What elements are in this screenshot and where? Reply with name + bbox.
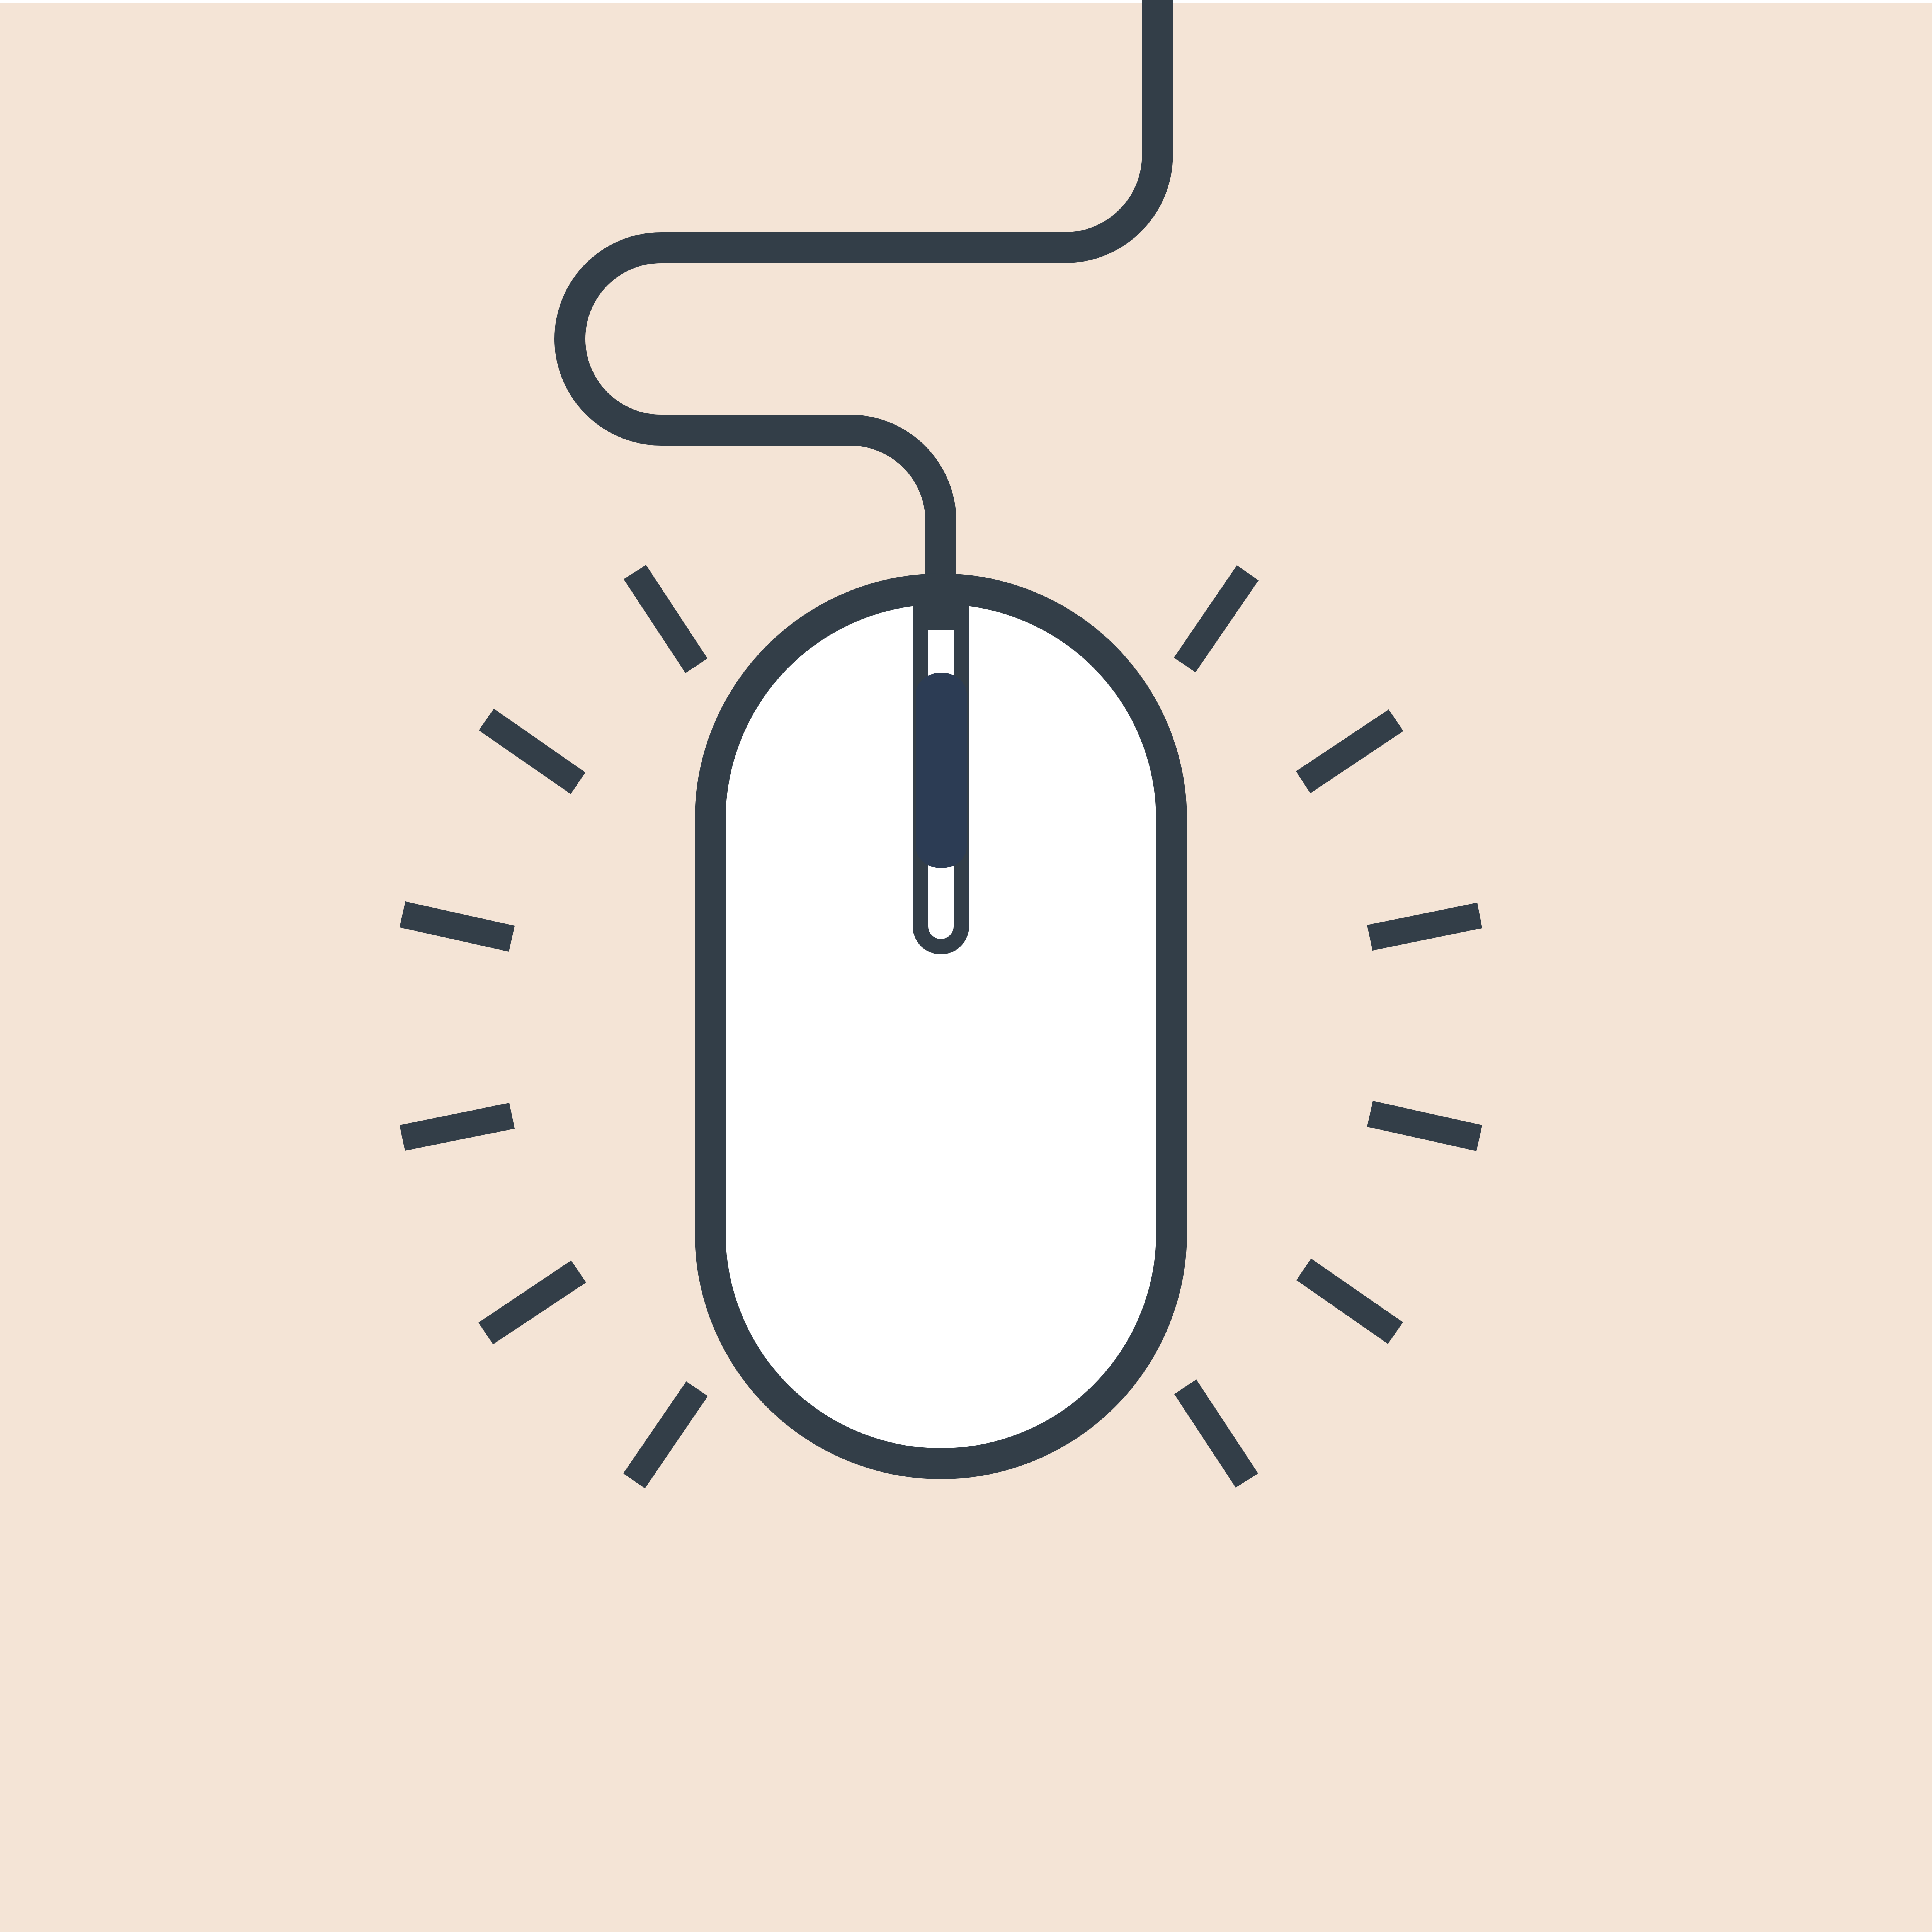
tick: upper right 1: [1174, 565, 1259, 672]
tick: lower right 3: [1367, 1101, 1482, 1151]
icon: mouse cable: [570, 0, 1158, 595]
icon: mouse body: [710, 589, 1172, 1464]
tick: lower left 2: [478, 1260, 586, 1344]
scroll track top cap: [913, 595, 969, 630]
tick: lower left 3: [400, 1103, 515, 1151]
tick: lower right 2: [1296, 1259, 1403, 1344]
tick: upper left 1: [624, 565, 707, 673]
tick: upper right 2: [1296, 709, 1403, 793]
tick: lower right 1: [1174, 1379, 1258, 1488]
tick: upper right 3: [1367, 903, 1482, 951]
tick: upper left 3: [400, 901, 515, 952]
top white strip: [0, 0, 1932, 3]
scroll track: [920, 599, 961, 947]
tick: lower left 1: [623, 1381, 708, 1488]
mouse body outline: [710, 589, 1172, 1464]
scroll wheel: [916, 673, 967, 868]
tick: upper left 2: [479, 709, 585, 794]
icon: radiating ticks: [400, 565, 1482, 1488]
